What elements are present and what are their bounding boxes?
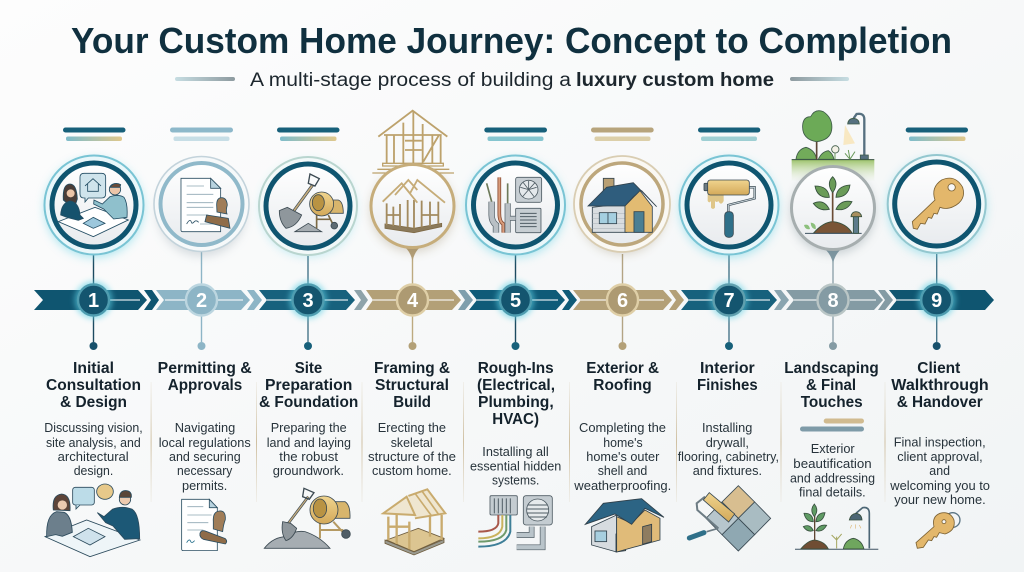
number badge: 5 (510, 290, 521, 312)
top bars (484, 128, 547, 141)
icon: paint roller (704, 180, 755, 237)
medallion (154, 156, 249, 256)
number badge (289, 281, 327, 319)
description: custom home. (372, 463, 452, 478)
top bars (277, 128, 340, 141)
description: structure of the (368, 449, 456, 464)
connector (90, 254, 98, 350)
description: shell and (598, 463, 647, 478)
number badge: 4 (407, 290, 419, 312)
heading: Approvals (168, 377, 242, 394)
number badge: 2 (196, 290, 207, 312)
icon: shovel and mixer (279, 174, 343, 232)
heading (697, 360, 758, 394)
heading (46, 360, 141, 411)
description: local regulations (159, 435, 251, 450)
number badge: 9 (931, 290, 942, 312)
description: and fixtures. (693, 463, 762, 478)
heading: Initial (73, 360, 114, 377)
icon: finished house (588, 178, 657, 232)
heading: Exterior & (586, 360, 659, 377)
medallion with pin (791, 166, 875, 263)
medallion (574, 156, 670, 254)
heading: Walkthrough (891, 377, 989, 394)
description: Completing the (579, 420, 666, 435)
description (889, 435, 990, 507)
description: your new home. (894, 492, 986, 507)
icon: roof framing above medallion (372, 111, 454, 173)
description (159, 420, 251, 493)
description: final details. (799, 485, 866, 500)
heading (374, 360, 450, 411)
description: and securing (169, 449, 241, 464)
subtitle: A multi-stage process of building a (250, 70, 571, 91)
connector (198, 252, 206, 350)
description: Navigating (175, 420, 235, 435)
description: Erecting the (378, 420, 446, 435)
description: flooring, cabinetry, (678, 449, 779, 464)
icon: pipes, fan and vent (487, 177, 542, 233)
description (470, 444, 561, 488)
icon: plant, shrub and lamp (795, 504, 878, 549)
description: Final inspection, (894, 435, 986, 450)
number badge (918, 281, 956, 319)
heading: & Design (60, 394, 127, 411)
heading (586, 360, 659, 394)
description: land and laying (267, 435, 351, 450)
heading: & Foundation (259, 394, 358, 411)
description: architectural (58, 449, 129, 464)
description (573, 420, 671, 493)
icon: meeting over blueprint (45, 484, 140, 557)
divider (463, 382, 464, 502)
icon: permit document (181, 178, 230, 232)
description: essential hidden (470, 458, 561, 474)
connector (933, 254, 941, 350)
number badge (496, 281, 534, 319)
step 8 (784, 111, 879, 549)
description: and (929, 463, 950, 478)
icon: document and stamp (182, 499, 227, 551)
description (678, 420, 779, 478)
heading: & Handover (897, 394, 983, 411)
description: home's (603, 435, 643, 450)
description: permits. (182, 478, 227, 493)
description: skeletal (391, 435, 433, 450)
divider (780, 382, 782, 502)
step 4 (368, 111, 456, 555)
icon: shovel, sand and mixer (264, 488, 350, 548)
divider (256, 382, 257, 502)
description (790, 441, 875, 500)
icon: consultation (58, 173, 128, 237)
description: welcoming you to (889, 478, 990, 493)
heading: (Electrical, (477, 377, 555, 394)
number badge (710, 281, 748, 319)
number badge: 7 (723, 290, 735, 312)
title: Your Custom Home Journey: Concept to Completion (71, 20, 952, 61)
step 7 (678, 128, 779, 551)
top bars (591, 128, 654, 141)
icon: roller on tile swatch (689, 486, 771, 551)
heading: Interior (700, 360, 755, 377)
icon: gold key (912, 178, 964, 229)
icon: house with blue roof (585, 499, 664, 552)
heading (259, 360, 358, 411)
heading: Landscaping (784, 360, 879, 377)
description: the robust (279, 449, 338, 464)
description: Installing all (482, 444, 549, 459)
description: beautification (793, 456, 872, 471)
description: Installing (702, 420, 752, 435)
step 6 (573, 128, 671, 552)
heading: Client (917, 360, 960, 377)
heading: Preparation (265, 377, 352, 394)
divider (676, 382, 677, 502)
heading: Permitting & (158, 360, 252, 377)
heading: Consultation (46, 377, 141, 394)
heading (891, 360, 989, 411)
description: Preparing the (271, 420, 347, 435)
connector (725, 254, 733, 350)
step 1 (44, 128, 143, 557)
icon: sapling and bollard (804, 177, 862, 233)
number badge (818, 284, 848, 316)
timeline arrow (34, 290, 994, 310)
icon: timber house frame (383, 489, 445, 555)
step 9 (888, 128, 990, 548)
heading (477, 360, 555, 428)
divider (362, 382, 363, 502)
description: systems. (492, 473, 539, 488)
top bars (170, 128, 233, 141)
heading: Build (393, 394, 431, 411)
description: groundwork. (273, 463, 344, 478)
description: necessary (177, 463, 233, 478)
subtitle: luxury custom home (576, 70, 774, 91)
step 5 (466, 128, 565, 547)
top bars (63, 128, 126, 141)
description: site analysis, and (46, 435, 141, 450)
top bars (698, 128, 760, 141)
description: Exterior (811, 441, 855, 456)
number badge (74, 281, 112, 319)
heading: Framing & (374, 360, 450, 377)
number badge (186, 284, 217, 316)
step 2 (154, 128, 252, 551)
connector (512, 254, 520, 350)
number badge: 1 (88, 290, 99, 312)
medallion (680, 156, 778, 257)
number badge: 6 (617, 290, 628, 312)
divider (151, 382, 152, 502)
divider (569, 382, 570, 502)
connector (408, 256, 416, 350)
heading: Roofing (593, 377, 652, 394)
heading: Site (295, 360, 323, 377)
description (368, 420, 456, 478)
divider (884, 382, 886, 502)
heading (158, 360, 252, 394)
icon: wiring and ducting (478, 496, 552, 547)
heading: Finishes (697, 377, 758, 394)
medallion (888, 155, 986, 256)
description: weatherproofing. (573, 478, 671, 493)
heading: Touches (801, 394, 863, 411)
accent bars (800, 418, 864, 432)
medallion (466, 156, 565, 257)
icon: landscape scene above medallion (792, 111, 874, 181)
description: drywall, (706, 435, 749, 450)
step 3 (259, 128, 358, 548)
icon: timber frame (383, 180, 445, 233)
icon: key on ring (916, 513, 960, 548)
heading: & Final (806, 377, 856, 394)
number badge (397, 284, 428, 316)
subtitle (175, 70, 849, 91)
number badge (607, 284, 638, 316)
description: Discussing vision, (44, 420, 143, 435)
description: design. (74, 463, 113, 478)
medallion with pin (370, 164, 454, 261)
heading: Plumbing, (478, 394, 554, 411)
connector (829, 258, 837, 350)
heading: HVAC) (492, 411, 539, 428)
heading (784, 360, 879, 411)
description: client approval, (897, 449, 983, 464)
top bars (906, 128, 968, 141)
connector (618, 254, 626, 350)
heading: Structural (375, 377, 449, 394)
description: home's outer (586, 449, 660, 464)
number badge: 8 (827, 290, 839, 312)
heading: Rough-Ins (478, 360, 554, 377)
medallion (44, 156, 144, 257)
number badge: 3 (302, 290, 314, 312)
medallion (259, 157, 357, 256)
description (267, 420, 351, 478)
connector (304, 254, 312, 350)
description: and addressing (790, 471, 875, 486)
description (44, 420, 143, 478)
